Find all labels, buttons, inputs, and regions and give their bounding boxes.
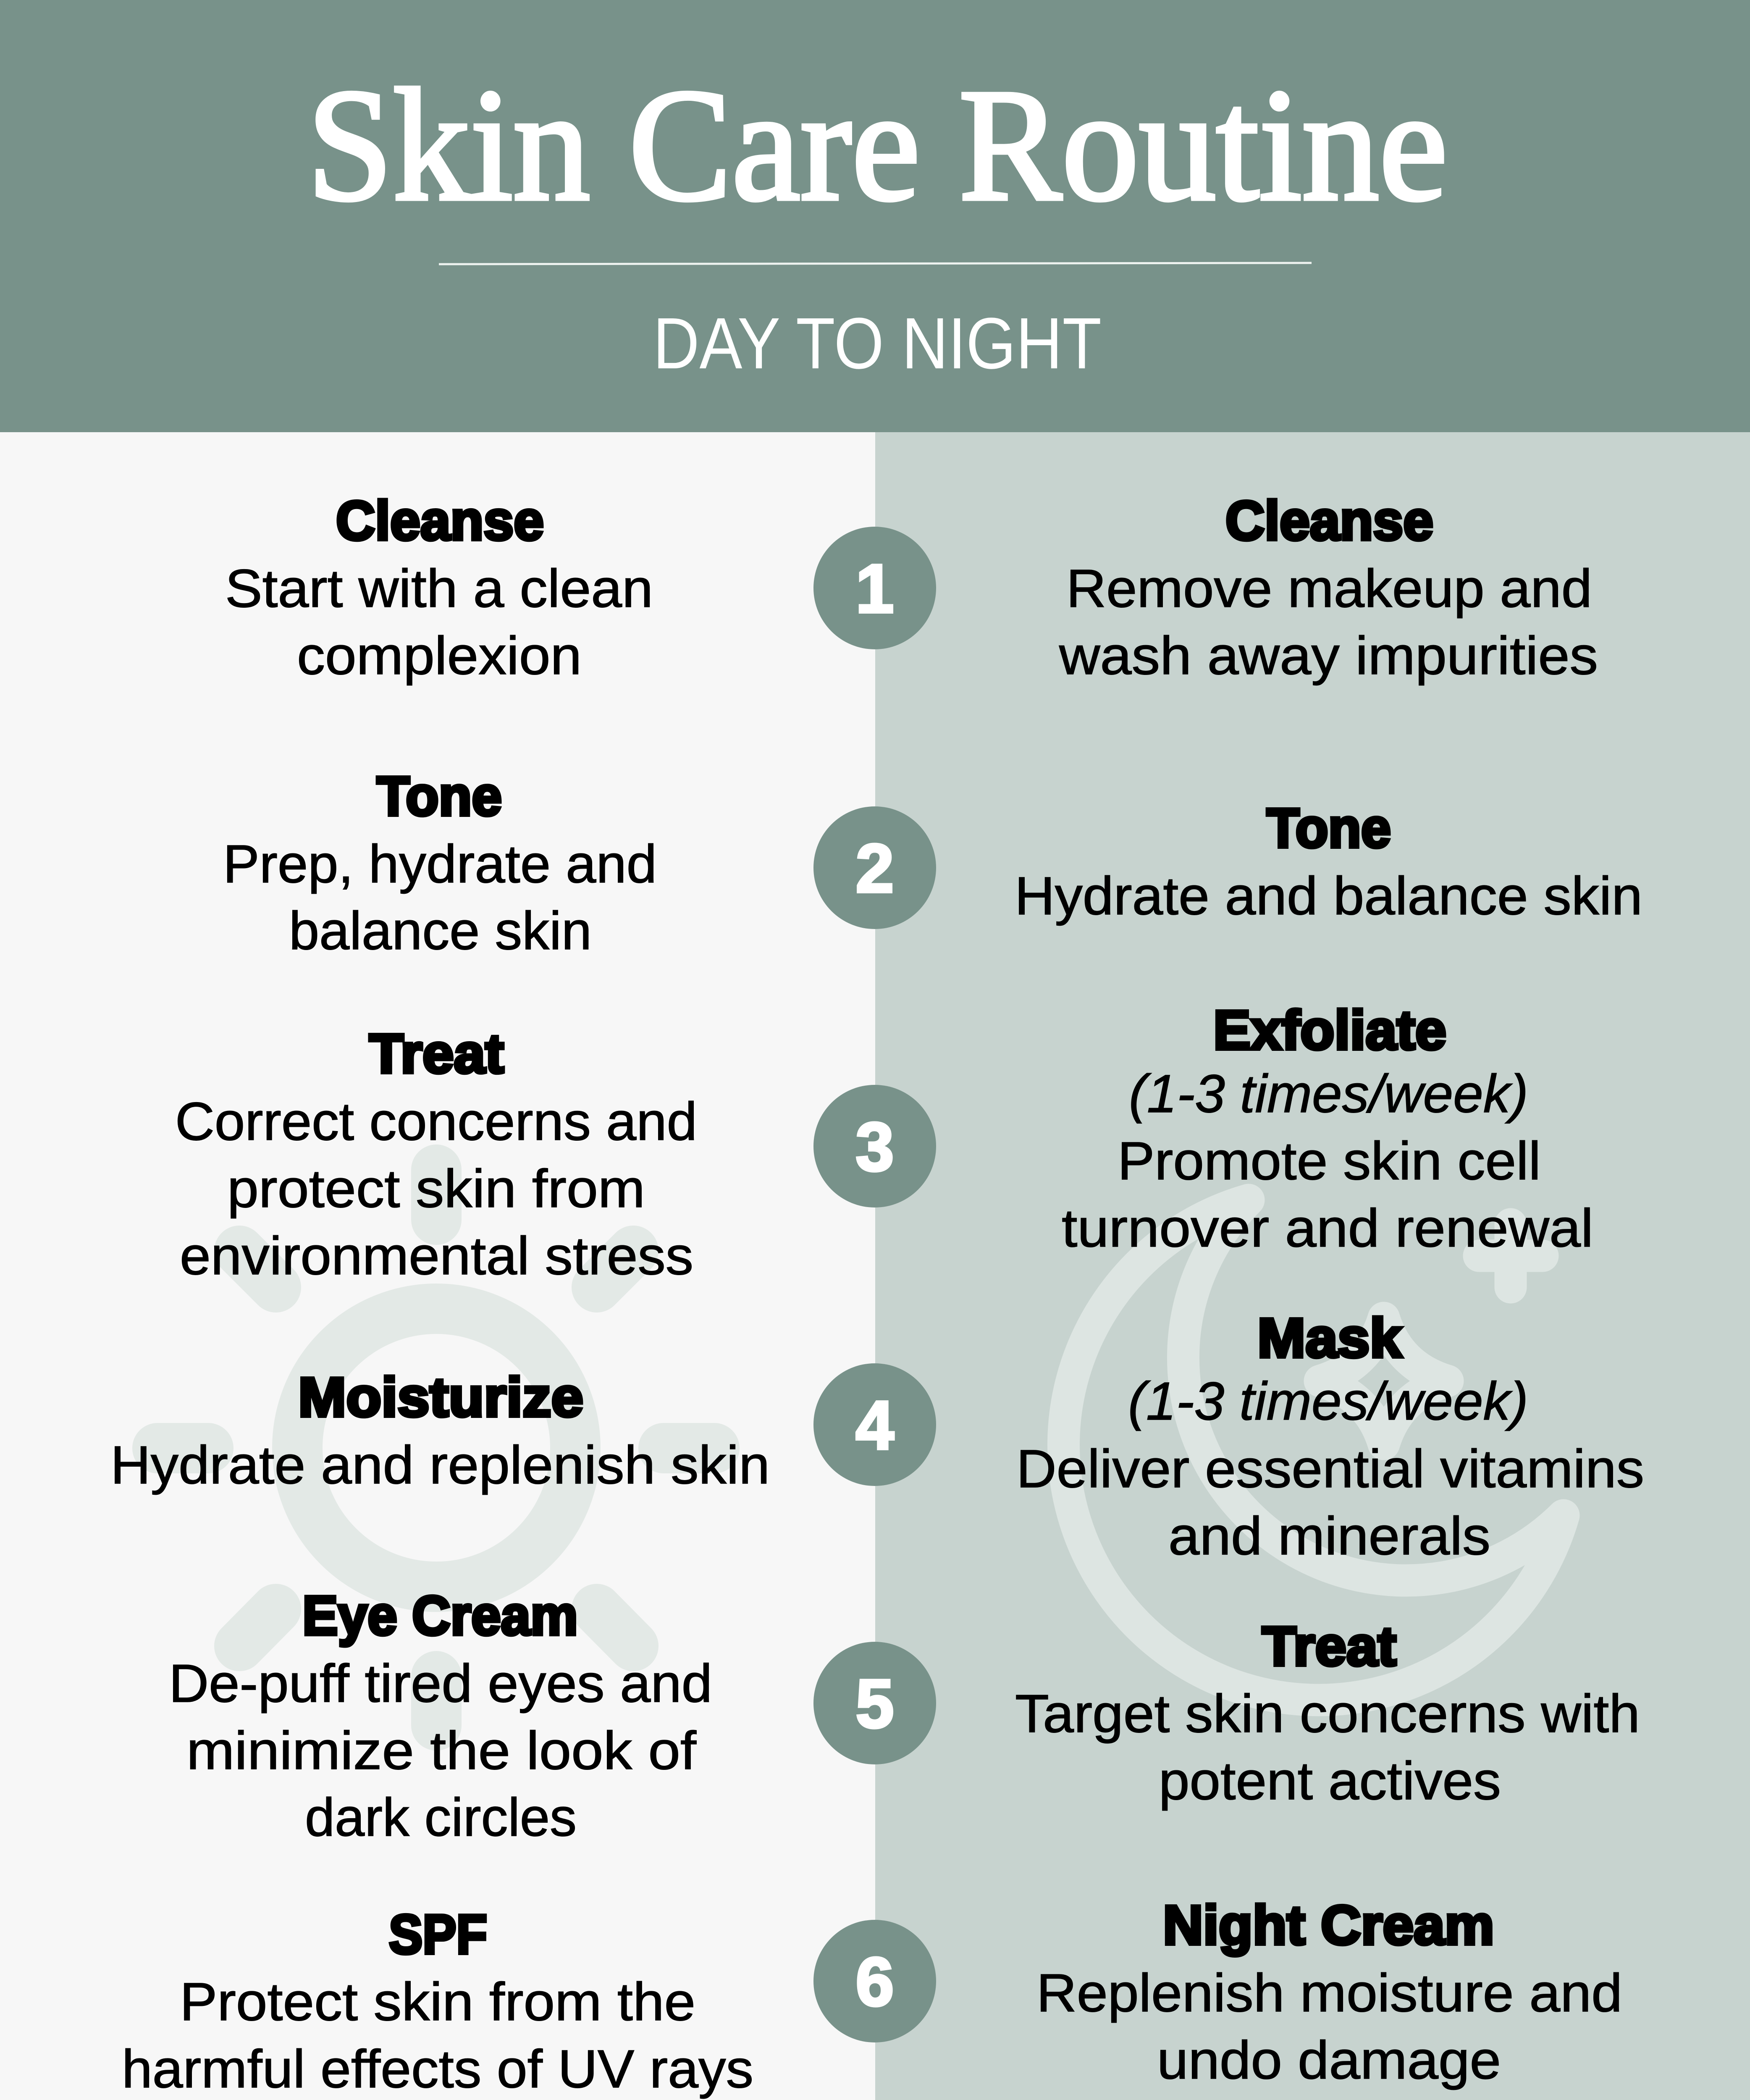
description: De-puff tired eyes and xyxy=(169,1654,712,1714)
description xyxy=(1036,1963,1622,2090)
description xyxy=(1016,1439,1644,1566)
heading: Night Cream xyxy=(1163,1894,1494,1956)
night step 5: Treat xyxy=(1015,1615,1640,1811)
number badge 1: 1 xyxy=(855,550,894,627)
description: minimize the look of xyxy=(186,1721,696,1781)
description: Protect skin from the xyxy=(180,1972,695,2032)
night step 4: Mask xyxy=(1016,1307,1644,1566)
icon: sun watermark xyxy=(157,1170,714,1725)
description: and minerals xyxy=(1168,1506,1490,1566)
description xyxy=(1015,1684,1640,1811)
heading: Cleanse xyxy=(336,490,544,551)
description: complexion xyxy=(297,626,582,686)
day step 4: Moisturize xyxy=(110,1366,770,1495)
night step 1: Cleanse xyxy=(1059,490,1598,686)
panel: night column background xyxy=(875,432,1750,2100)
description: protect skin from xyxy=(227,1159,645,1219)
number badge 3 xyxy=(813,1085,936,1208)
number badge 2: 2 xyxy=(855,830,894,907)
description: balance skin xyxy=(289,901,592,961)
description xyxy=(225,559,653,686)
description: Prep, hydrate and xyxy=(223,834,657,894)
description: Remove makeup and xyxy=(1066,559,1592,619)
title: Skin Care Routine xyxy=(307,56,1448,234)
number badge 1 xyxy=(813,527,936,649)
description: Hydrate and replenish skin xyxy=(110,1435,770,1495)
number badge 2 xyxy=(813,806,936,929)
description xyxy=(1062,1131,1593,1258)
description: harmful effects of UV rays xyxy=(122,2039,753,2099)
description: Promote skin cell xyxy=(1118,1131,1541,1191)
description xyxy=(1059,559,1598,686)
heading: Treat xyxy=(1262,1615,1396,1677)
number badge 4: 4 xyxy=(855,1387,894,1464)
description xyxy=(122,1972,753,2099)
heading: Eye Cream xyxy=(302,1585,578,1646)
panel: day column background xyxy=(0,432,875,2100)
description: Hydrate and balance skin xyxy=(1015,866,1642,926)
heading: SPF xyxy=(389,1903,487,1965)
description: potent actives xyxy=(1159,1751,1501,1811)
heading: Tone xyxy=(377,765,502,827)
description xyxy=(223,834,657,961)
frequency note: (1-3 times/week) xyxy=(1128,1371,1528,1431)
day step 2: Tone xyxy=(223,765,657,961)
number badge 5: 5 xyxy=(855,1665,894,1742)
night step 3: Exfoliate xyxy=(1062,999,1593,1258)
heading: Treat xyxy=(369,1023,504,1084)
heading: Mask xyxy=(1257,1307,1402,1369)
night step 6: Night Cream xyxy=(1036,1894,1622,2090)
description: dark circles xyxy=(305,1788,577,1848)
number badge 4 xyxy=(813,1363,936,1486)
description: turnover and renewal xyxy=(1062,1198,1593,1258)
number badge 5 xyxy=(813,1642,936,1764)
day step 5: Eye Cream xyxy=(169,1585,712,1848)
description xyxy=(175,1092,697,1286)
day step 6: SPF xyxy=(122,1903,753,2099)
subtitle: DAY TO NIGHT xyxy=(653,302,1102,384)
description: wash away impurities xyxy=(1059,626,1598,686)
number badge 6 xyxy=(813,1920,936,2042)
description xyxy=(169,1654,712,1848)
heading: Exfoliate xyxy=(1213,999,1446,1061)
description: Replenish moisture and xyxy=(1036,1963,1622,2023)
description: Correct concerns and xyxy=(175,1092,697,1152)
day step 3: Treat xyxy=(175,1023,697,1286)
description: environmental stress xyxy=(180,1226,693,1286)
night step 2: Tone xyxy=(1015,797,1642,926)
frequency note: (1-3 times/week) xyxy=(1129,1064,1528,1124)
number badge 3: 3 xyxy=(855,1108,894,1185)
icon: moon and stars watermark xyxy=(1064,1200,1564,1700)
day step 1: Cleanse xyxy=(225,490,653,686)
number badge 6: 6 xyxy=(855,1943,894,2020)
description: Target skin concerns with xyxy=(1015,1684,1640,1744)
heading: Moisturize xyxy=(298,1366,583,1428)
description: Deliver essential vitamins xyxy=(1016,1439,1644,1499)
heading: Cleanse xyxy=(1225,490,1433,551)
description: undo damage xyxy=(1157,2030,1501,2090)
description: Start with a clean xyxy=(225,559,653,619)
header banner xyxy=(0,0,1750,432)
heading: Tone xyxy=(1267,797,1391,859)
